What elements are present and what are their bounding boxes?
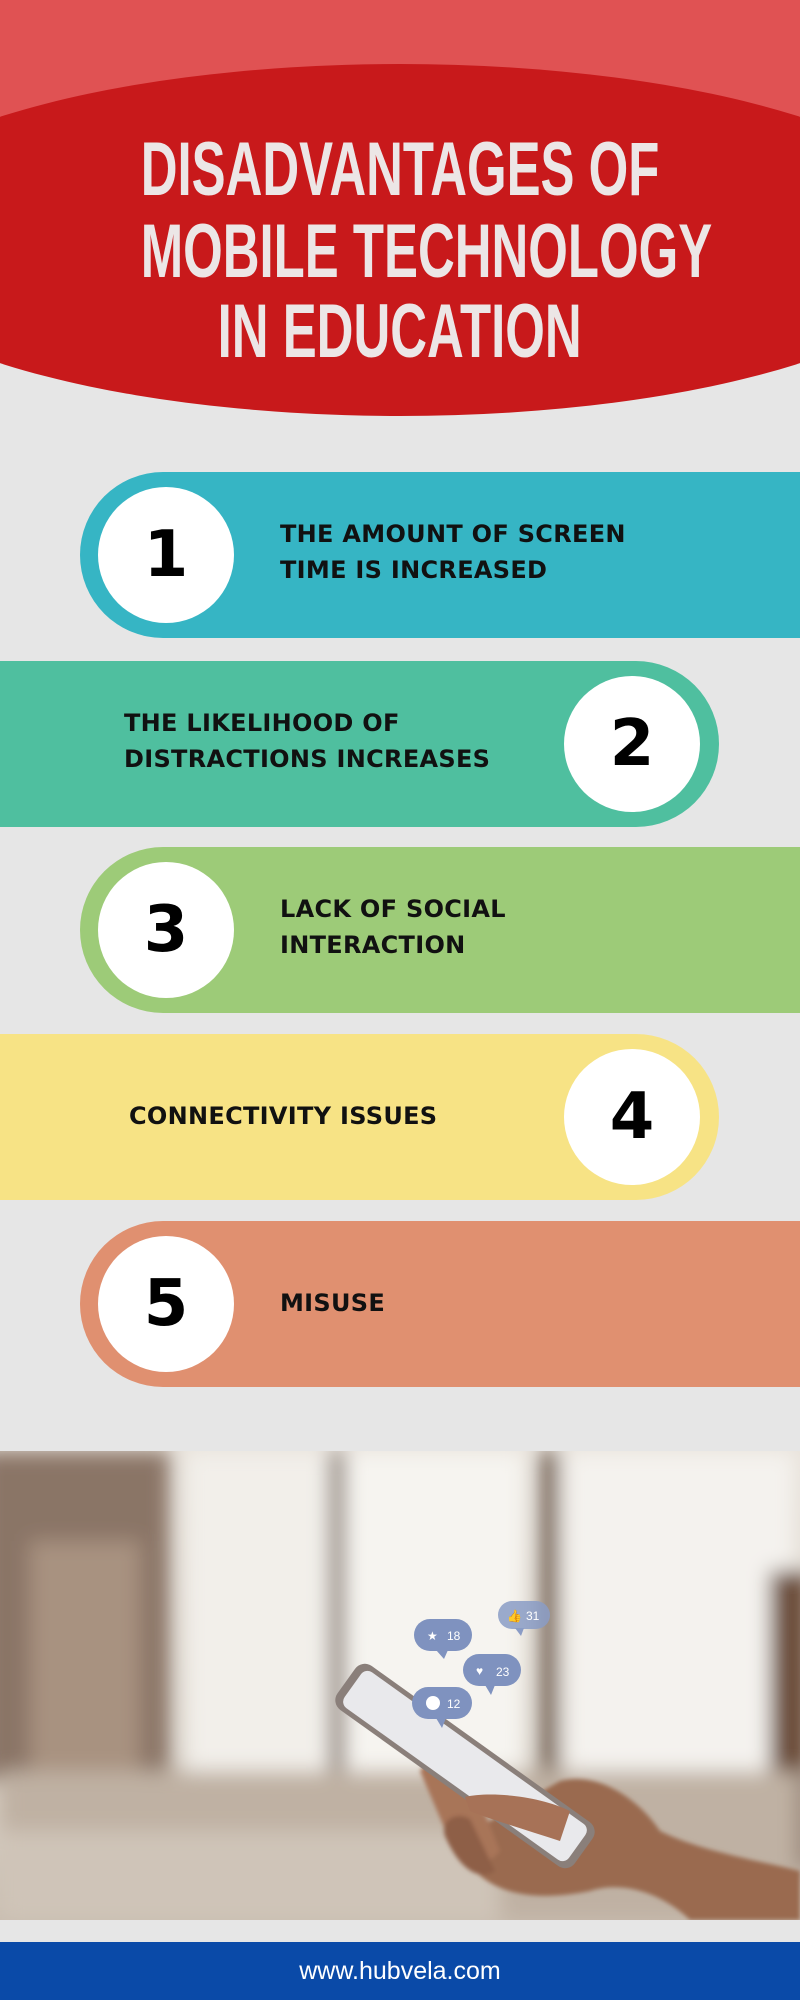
panel 3 bbox=[80, 847, 800, 1013]
number 3: 3 bbox=[144, 893, 188, 967]
number 2: 2 bbox=[610, 707, 654, 781]
title: DISADVANTAGES OF bbox=[141, 127, 659, 212]
notification bubbles bbox=[412, 1601, 550, 1728]
notification bubbles: ♥ bbox=[476, 1664, 483, 1678]
number 2 bbox=[564, 676, 700, 812]
hand bbox=[420, 1760, 800, 1920]
text 3: INTERACTION bbox=[280, 931, 466, 959]
panel 2 bbox=[0, 661, 719, 827]
text 3: LACK OF SOCIAL bbox=[280, 895, 506, 923]
title bbox=[141, 127, 712, 374]
number 5: 5 bbox=[144, 1267, 188, 1341]
footer: www.hubvela.com bbox=[299, 1957, 501, 1985]
text 3 bbox=[280, 895, 506, 959]
text 5: MISUSE bbox=[280, 1289, 385, 1317]
notification bubbles: 23 bbox=[496, 1665, 510, 1679]
text 1 bbox=[280, 520, 626, 584]
header bbox=[0, 0, 800, 416]
text 2 bbox=[124, 709, 490, 773]
footer bbox=[0, 1942, 800, 2000]
phone bbox=[331, 1659, 599, 1873]
panel 4 bbox=[0, 1034, 719, 1200]
number 3 bbox=[98, 862, 234, 998]
number 1 bbox=[98, 487, 234, 623]
photo: hand holding phone bbox=[0, 1451, 800, 1920]
number 4 bbox=[564, 1049, 700, 1185]
text 1: THE AMOUNT OF SCREEN bbox=[280, 520, 626, 548]
notification bubbles: 👍 bbox=[507, 1609, 522, 1623]
notification bubbles: 18 bbox=[447, 1629, 461, 1643]
number 1: 1 bbox=[144, 518, 188, 592]
title: IN EDUCATION bbox=[218, 289, 582, 374]
notification bubbles: ★ bbox=[427, 1629, 438, 1643]
notification bubbles: 31 bbox=[526, 1609, 540, 1623]
thumb bbox=[465, 1795, 570, 1841]
title: MOBILE TECHNOLOGY bbox=[141, 209, 712, 294]
number 4: 4 bbox=[610, 1080, 654, 1154]
number 5 bbox=[98, 1236, 234, 1372]
notification bubbles: 12 bbox=[447, 1697, 461, 1711]
text 2: THE LIKELIHOOD OF bbox=[124, 709, 400, 737]
text 1: TIME IS INCREASED bbox=[280, 556, 547, 584]
panel 5 bbox=[80, 1221, 800, 1387]
panel 1 bbox=[80, 472, 800, 638]
text 2: DISTRACTIONS INCREASES bbox=[124, 745, 490, 773]
text 4: CONNECTIVITY ISSUES bbox=[129, 1102, 437, 1130]
